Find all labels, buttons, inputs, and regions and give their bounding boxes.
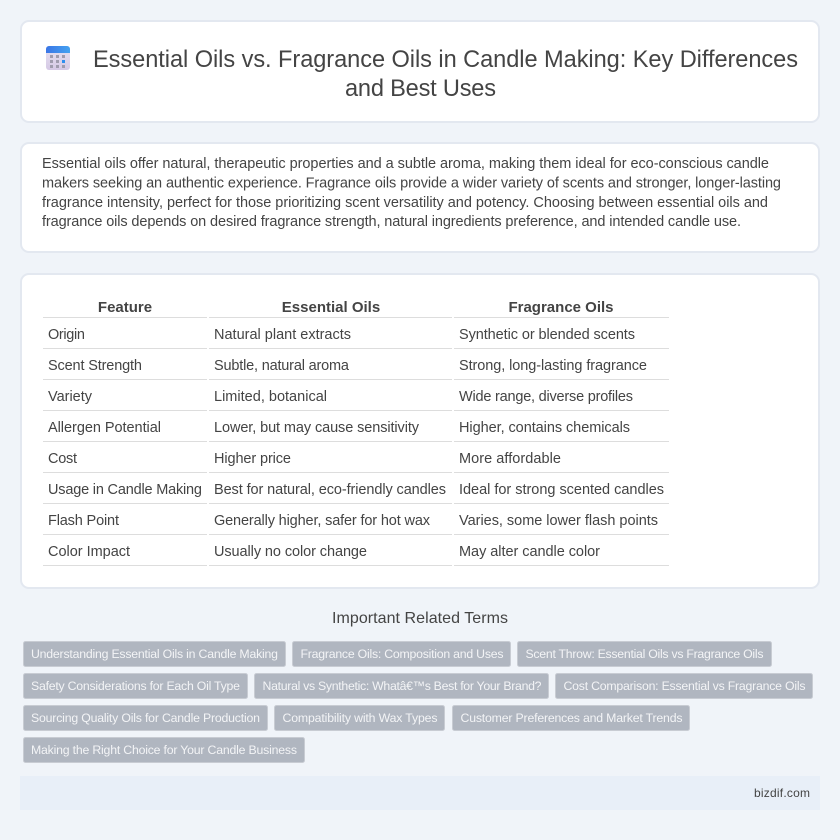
table rows: Usually no color change — [214, 544, 367, 560]
table rows: Ideal for strong scented candles — [459, 482, 664, 498]
table rows: Scent Strength — [48, 358, 142, 374]
panel: intro paragraph: fragrance oils depends on desired fragrance strength, natural ingredients preference, and intended candle use. — [42, 214, 741, 230]
table rows: Limited, botanical — [214, 389, 327, 405]
title: Essential Oils vs. Fragrance Oils in Candle Making: Key Differences — [93, 47, 798, 73]
tag — [24, 738, 304, 762]
panel: comparison table — [21, 274, 819, 588]
table rows: Lower, but may cause sensitivity — [214, 420, 420, 436]
related term tags — [24, 642, 812, 762]
table header — [98, 299, 614, 316]
tag: Safety Considerations for Each Oil Type — [31, 679, 240, 693]
table rows: Flash Point — [48, 513, 119, 529]
table header: Feature — [98, 299, 152, 316]
table rows: Origin — [48, 327, 85, 343]
table rows: Generally higher, safer for hot wax — [214, 513, 431, 529]
tag: Compatibility with Wax Types — [282, 711, 438, 725]
tag: Customer Preferences and Market Trends — [460, 711, 682, 725]
table rows: Higher price — [214, 451, 291, 467]
table rows: Strong, long-lasting fragrance — [459, 358, 647, 374]
table rows: Synthetic or blended scents — [459, 327, 635, 343]
title — [93, 47, 798, 102]
footer — [20, 776, 820, 810]
tag: Understanding Essential Oils in Candle Making — [31, 647, 278, 661]
footer: bizdif.com — [754, 786, 810, 800]
tag: Fragrance Oils: Composition and Uses — [300, 647, 504, 661]
table rows: Higher, contains chemicals — [459, 420, 630, 436]
tag: Making the Right Choice for Your Candle Business — [31, 743, 297, 757]
tag: Sourcing Quality Oils for Candle Production — [31, 711, 260, 725]
tag — [292, 642, 510, 666]
table rows: Cost — [48, 451, 77, 467]
table rows: Allergen Potential — [48, 420, 161, 436]
tag — [556, 674, 812, 698]
tag — [24, 642, 286, 666]
panel: intro paragraph: makers seeking an authentic experience. Fragrance oils provide a wider variety of scents and stronger, longer-lasting — [42, 176, 781, 192]
table rows: Color Impact — [48, 544, 130, 560]
tag — [274, 706, 444, 730]
table rows: Subtle, natural aroma — [214, 358, 350, 374]
table rows: Natural plant extracts — [214, 327, 351, 343]
table header: Essential Oils — [282, 299, 380, 316]
title: and Best Uses — [345, 76, 496, 102]
table rows: Best for natural, eco-friendly candles — [214, 482, 446, 498]
tag — [24, 674, 248, 698]
table rows: Variety — [48, 389, 93, 405]
table rows: More affordable — [459, 451, 561, 467]
table rows: Usage in Candle Making — [48, 482, 202, 498]
table rows: May alter candle color — [459, 544, 600, 560]
icon: calendar — [46, 46, 70, 70]
tag — [254, 674, 548, 698]
tag — [24, 706, 268, 730]
heading: related terms: Important Related Terms — [332, 610, 508, 627]
tag — [518, 642, 772, 666]
panel: intro paragraph — [21, 143, 819, 252]
table header: Fragrance Oils — [508, 299, 614, 316]
table rows: Wide range, diverse profiles — [459, 389, 633, 405]
tag: Natural vs Synthetic: Whatâ€™s Best for Your Brand? — [262, 679, 542, 693]
panel: intro paragraph: Essential oils offer natural, therapeutic properties and a subtle aroma, making them ideal for eco-conscious candle — [42, 156, 769, 172]
tag: Cost Comparison: Essential vs Fragrance Oils — [564, 679, 806, 693]
table rows — [48, 327, 664, 560]
tag — [452, 706, 690, 730]
panel: header — [21, 21, 819, 122]
table rows: Varies, some lower flash points — [459, 513, 658, 529]
panel: intro paragraph: fragrance intensity, perfect for those prioritizing scent versatility and potency. Choosing between essential oils and — [42, 195, 768, 211]
tag: Scent Throw: Essential Oils vs Fragrance Oils — [526, 647, 764, 661]
